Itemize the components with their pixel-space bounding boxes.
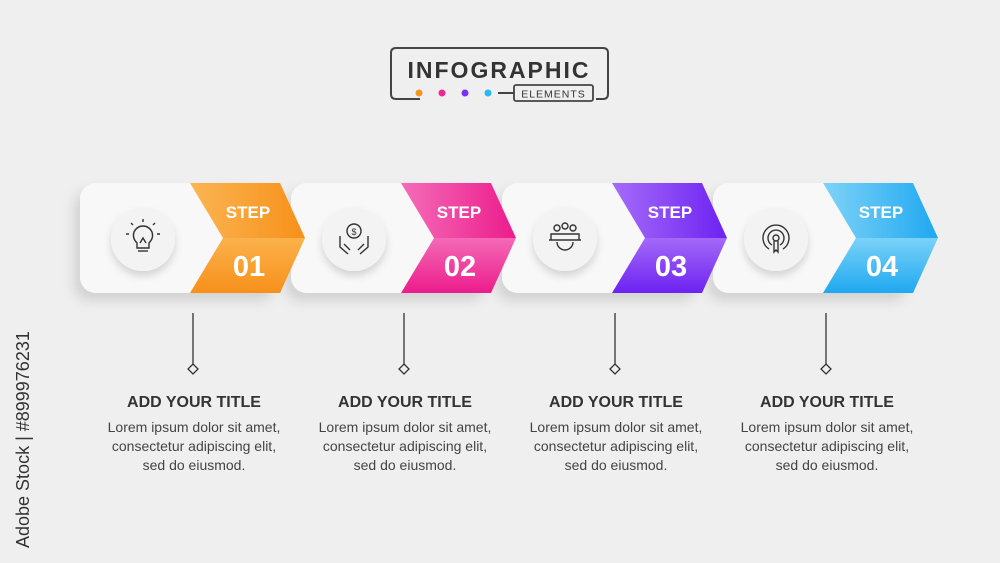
text block 4: [741, 394, 913, 473]
step 1: [111, 183, 305, 293]
chevron 02: [401, 183, 516, 293]
chevron 04: 04: [866, 251, 898, 283]
text block 3: Lorem ipsum dolor sit amet,: [530, 419, 702, 435]
icon circle: team gear: [533, 207, 597, 271]
title block: ELEMENTS: [521, 88, 586, 100]
text block 2: sed do eiusmod.: [354, 457, 456, 473]
chevron 01: [190, 183, 305, 293]
text block 4: consectetur adipiscing elit,: [745, 438, 909, 454]
step 4: [744, 183, 938, 293]
icon circle: money hands: [322, 207, 386, 271]
text block 2: [319, 394, 491, 473]
chevron 04: STEP: [859, 203, 903, 222]
step 2: [322, 183, 516, 293]
text block 2: Lorem ipsum dolor sit amet,: [319, 419, 491, 435]
chevron 02: STEP: [437, 203, 481, 222]
text block 1: [108, 394, 280, 473]
text block 4: ADD YOUR TITLE: [760, 394, 894, 411]
chevron 03: 03: [655, 251, 687, 283]
chevron 01: STEP: [226, 203, 270, 222]
text block 1: Lorem ipsum dolor sit amet,: [108, 419, 280, 435]
icon circle: signal: [744, 207, 808, 271]
chevron 03: STEP: [648, 203, 692, 222]
step 3: [533, 183, 727, 293]
text block 3: consectetur adipiscing elit,: [534, 438, 698, 454]
chevron 04: [823, 183, 938, 293]
text block 4: Lorem ipsum dolor sit amet,: [741, 419, 913, 435]
text block 1: sed do eiusmod.: [143, 457, 245, 473]
cards: [80, 183, 913, 293]
chevron 01: 01: [233, 251, 265, 283]
title block: INFOGRAPHIC: [408, 57, 590, 83]
chevron 02: 02: [444, 251, 476, 283]
text block 1: consectetur adipiscing elit,: [112, 438, 276, 454]
icon circle: lightbulb: [111, 207, 175, 271]
text block 3: ADD YOUR TITLE: [549, 394, 683, 411]
chevron 03: [612, 183, 727, 293]
watermark id: Adobe Stock | #899976231: [13, 331, 33, 548]
text block 1: ADD YOUR TITLE: [127, 394, 261, 411]
text block 2: ADD YOUR TITLE: [338, 394, 472, 411]
connectors: [188, 313, 831, 374]
text block 2: consectetur adipiscing elit,: [323, 438, 487, 454]
text block 3: [530, 394, 702, 473]
title block: [391, 48, 608, 101]
text block 3: sed do eiusmod.: [565, 457, 667, 473]
text block 4: sed do eiusmod.: [776, 457, 878, 473]
icon circle: money hands: $: [351, 227, 357, 237]
